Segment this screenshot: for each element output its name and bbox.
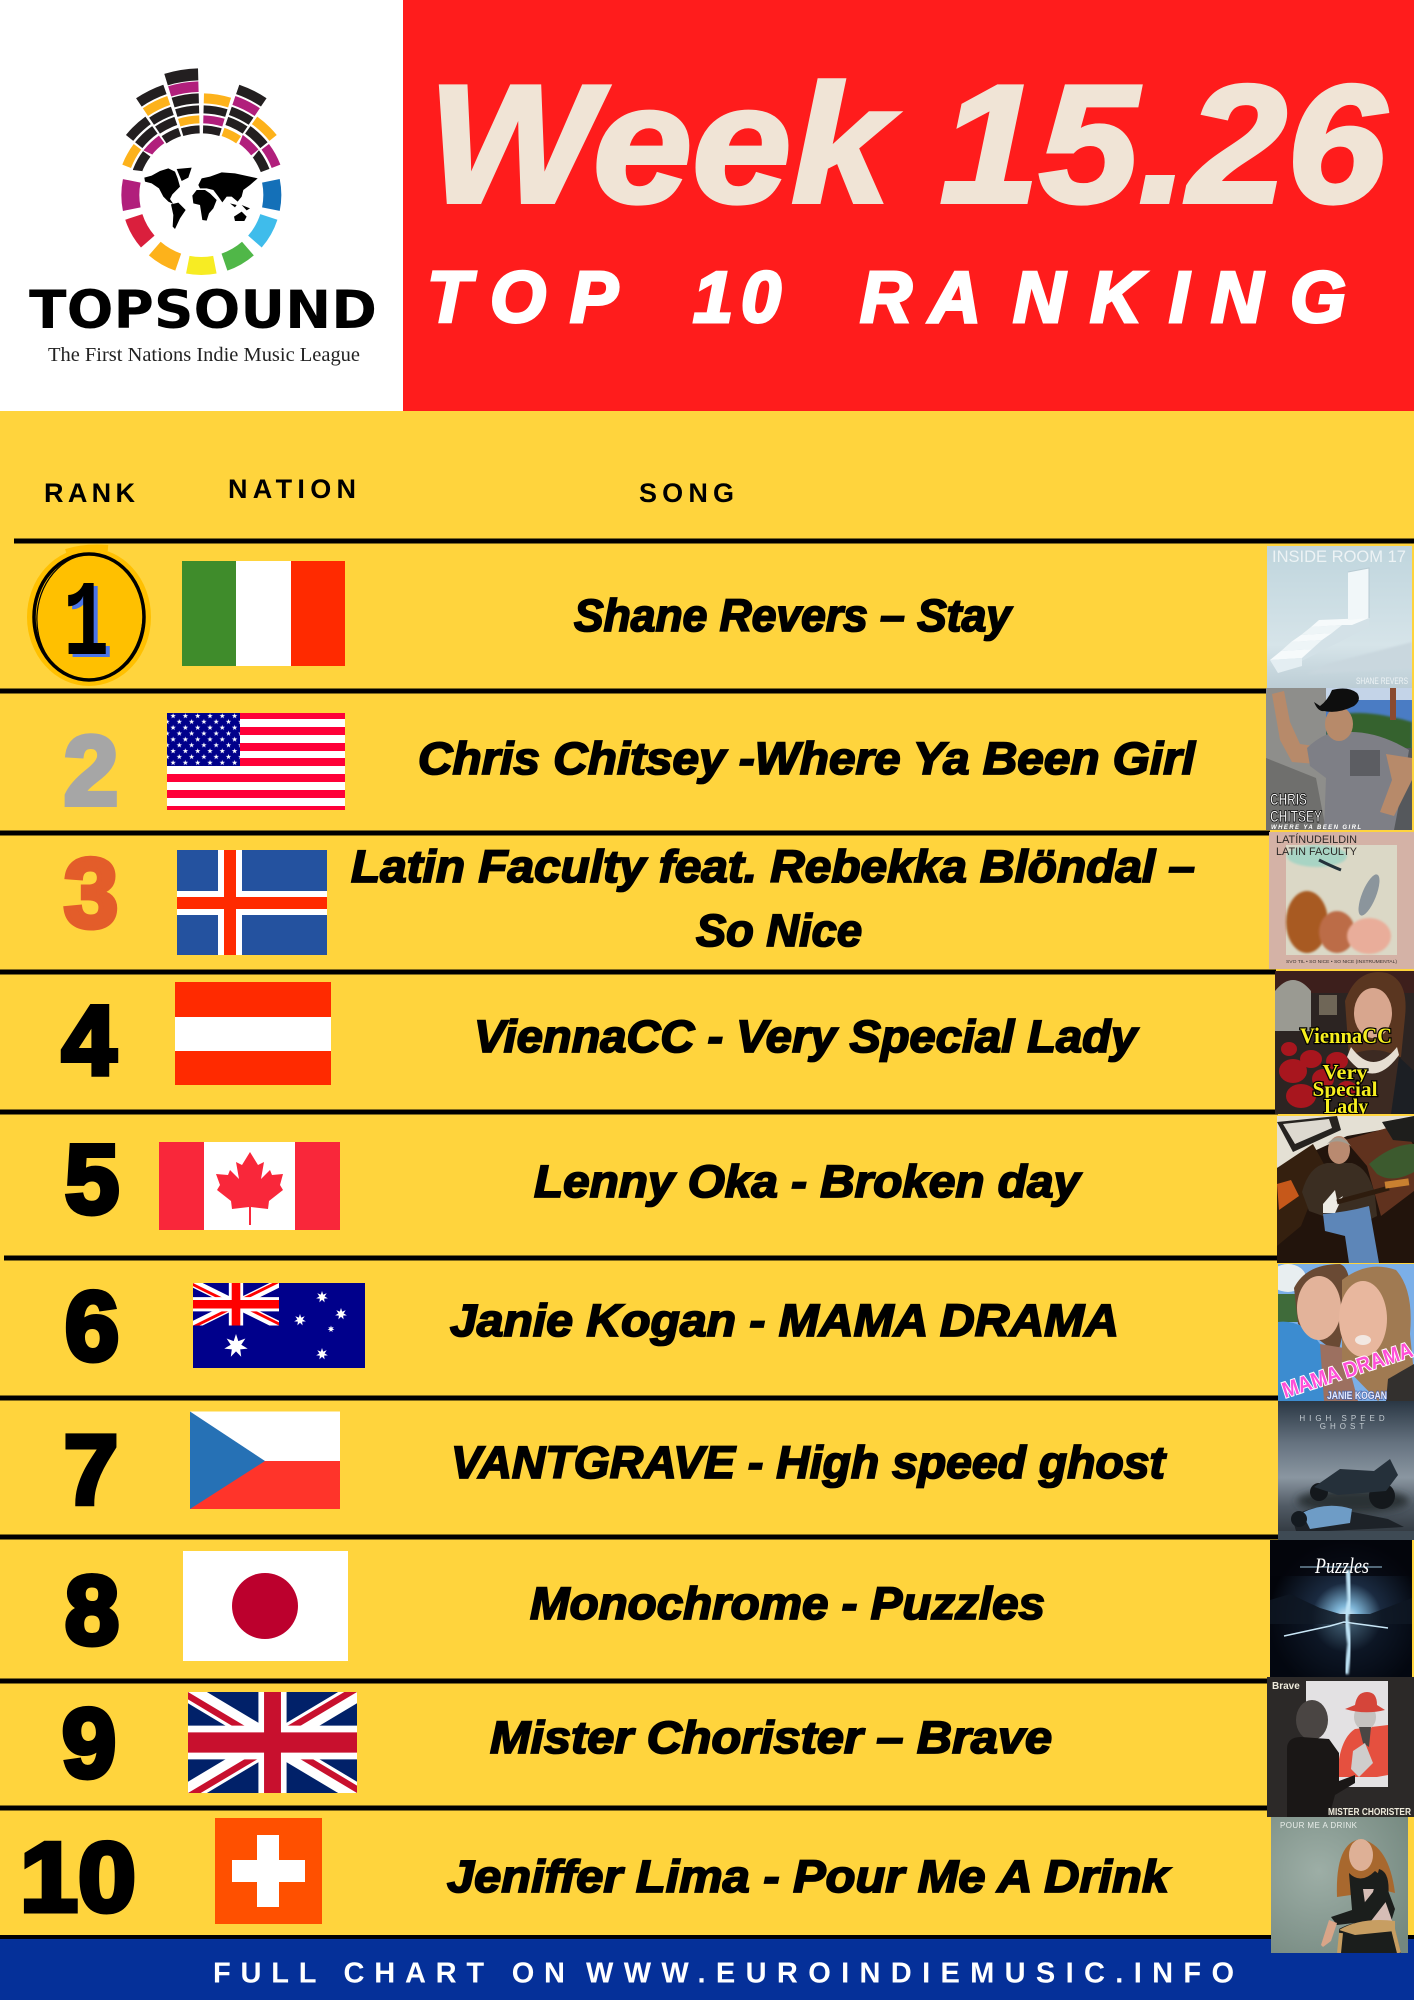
album cover 9: Mister Chorister Brave <box>1267 1677 1414 1818</box>
flag: United Kingdom <box>188 1692 357 1793</box>
album cover 3: Latin Faculty: LATIN FACULTY <box>1276 846 1358 858</box>
column headers: NATION <box>228 474 356 504</box>
flag: Switzerland <box>215 1818 322 1924</box>
album cover 4: ViennaCC: Lady <box>1324 1094 1368 1118</box>
album cover 7: Vantgrave: HIGH SPEED <box>1299 1414 1389 1423</box>
song 3: So Nice <box>696 905 862 956</box>
song 6: Janie Kogan - MAMA DRAMA <box>450 1295 1119 1346</box>
song 7: VANTGRAVE - High speed ghost <box>451 1437 1167 1488</box>
album cover 2: Chris Chitsey <box>1266 688 1412 831</box>
song 9: Mister Chorister – Brave <box>490 1712 1052 1763</box>
album cover 2: Chris Chitsey: WHERE YA BEEN GIRL <box>1271 825 1361 831</box>
logo tagline: The First Nations Indie Music League <box>48 344 360 366</box>
album cover 8: Monochrome Puzzles <box>1270 1540 1412 1677</box>
album cover 6: Janie Kogan: JANIE KOGAN <box>1327 1390 1387 1402</box>
logo wordmark: TOPSOUND <box>29 280 377 341</box>
song 3: Latin Faculty feat. Rebekka Blöndal – <box>351 841 1195 892</box>
flag: Japan <box>183 1551 348 1661</box>
column headers: SONG <box>639 478 734 508</box>
flag: Czech Republic <box>190 1412 340 1509</box>
rank 1 badge: 1 <box>63 565 109 687</box>
song 2: Chris Chitsey -Where Ya Been Girl <box>418 733 1197 784</box>
album cover 3: Latin Faculty: LATÍNUDEILDIN <box>1276 833 1357 846</box>
album cover 8: Monochrome Puzzles: Puzzles <box>1314 1553 1369 1578</box>
icon: topsound globe logo <box>46 40 356 350</box>
album cover 4: ViennaCC <box>1275 971 1414 1118</box>
album cover 7: Vantgrave: GHOST <box>1320 1422 1368 1431</box>
panel: logo <box>0 0 403 411</box>
song 8: Monochrome - Puzzles <box>530 1578 1045 1629</box>
flag: Iceland <box>177 850 327 955</box>
rank 1 badge: 1 <box>67 568 113 690</box>
flag: Canada <box>159 1142 340 1230</box>
rank 10: 10 <box>20 1822 136 1932</box>
album cover 6: Janie Kogan <box>1278 1264 1414 1403</box>
rank 3: 3 <box>64 838 118 948</box>
rank 9: 9 <box>62 1688 116 1798</box>
subtitle: top 10 ranking: TOP 10 RANKING <box>427 258 1346 338</box>
flag: Italy <box>182 561 345 666</box>
rank 7: 7 <box>64 1414 118 1524</box>
rank 4: 4 <box>62 986 116 1096</box>
album cover 2: Chris Chitsey: CHRIS <box>1270 790 1307 809</box>
song 10: Jeniffer Lima - Pour Me A Drink <box>447 1851 1171 1902</box>
song 4: ViennaCC - Very Special Lady <box>474 1011 1139 1062</box>
flag: Australia <box>193 1283 365 1368</box>
album cover 3: Latin Faculty: SVO TIL • SO NICE • SO NICE (INSTRUMENTAL) <box>1286 959 1398 964</box>
flag: USA <box>167 713 345 810</box>
rank 1 badge <box>27 548 151 690</box>
album cover 7: Vantgrave <box>1278 1401 1414 1540</box>
rank 5: 5 <box>65 1124 119 1234</box>
song 1: Shane Revers – Stay <box>574 590 1013 641</box>
album cover 1: Inside Room 17: INSIDE ROOM 17 <box>1272 547 1406 566</box>
album cover 10: Jeniffer Lima <box>1271 1817 1408 1953</box>
rank 2: 2 <box>64 716 118 826</box>
column headers: RANK <box>44 478 136 508</box>
footer link text: FULL CHART ON <box>213 1958 565 1990</box>
album cover 1: Inside Room 17 <box>1267 546 1412 688</box>
album cover 9: Mister Chorister Brave: Brave <box>1272 1681 1300 1692</box>
footer link text <box>213 1958 1234 1990</box>
song 5: Lenny Oka - Broken day <box>534 1156 1082 1207</box>
flag: Austria <box>175 982 331 1085</box>
album cover 2: Chris Chitsey: CHITSEY <box>1270 807 1322 826</box>
album cover 10: Jeniffer Lima: POUR ME A DRINK <box>1280 1821 1358 1830</box>
column headers <box>44 474 734 508</box>
footer link text: WWW.EUROINDIEMUSIC.INFO <box>586 1958 1234 1990</box>
song 3 <box>351 841 1195 956</box>
album cover 4: ViennaCC: Special <box>1312 1077 1378 1101</box>
album cover 4: ViennaCC: Very <box>1322 1060 1368 1084</box>
rank 8: 8 <box>65 1555 119 1665</box>
row dividers <box>0 538 1414 1940</box>
album cover 3: Latin Faculty <box>1269 832 1414 969</box>
rank 6: 6 <box>65 1271 119 1381</box>
panel: title banner <box>403 0 1414 411</box>
album cover 4: ViennaCC: ViennaCC <box>1300 1023 1392 1048</box>
title: week number: Week 15.26 <box>428 50 1388 238</box>
footer bar <box>0 1939 1414 2000</box>
album cover 5: Lenny Oka <box>1277 1116 1414 1263</box>
